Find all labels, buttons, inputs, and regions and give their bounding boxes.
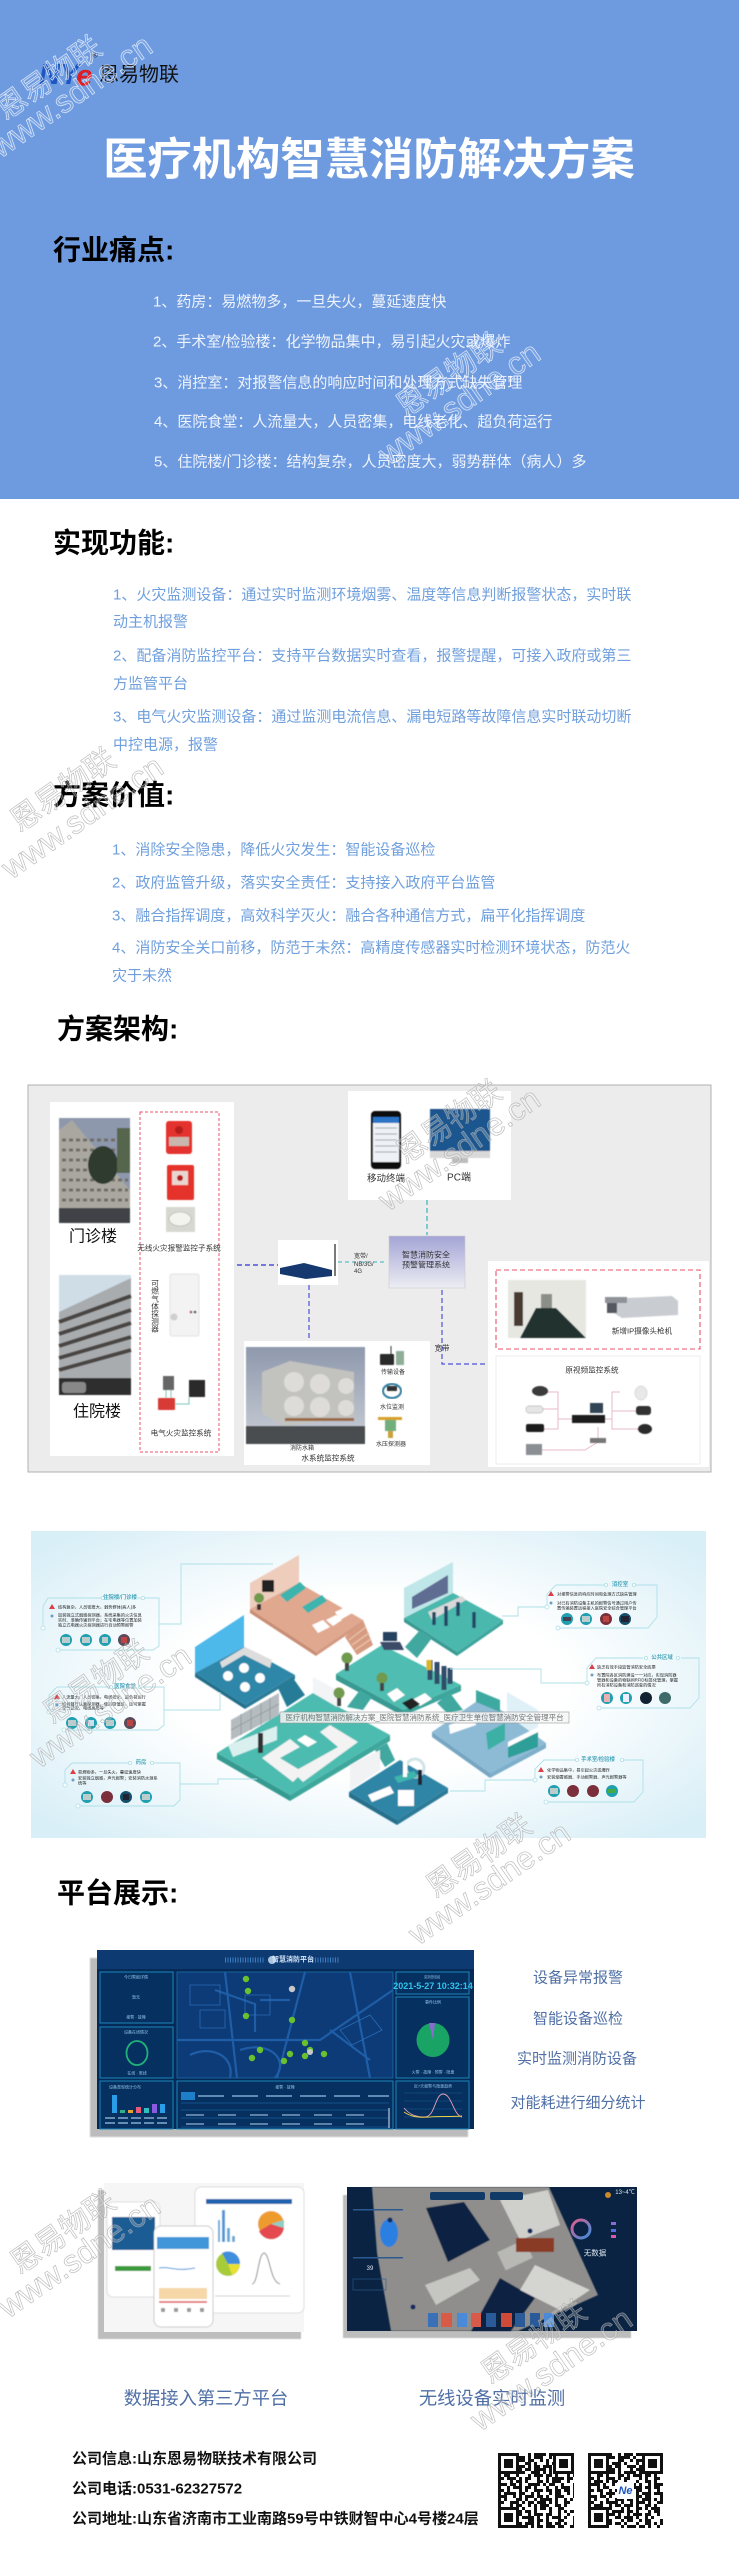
company info: 公司地址:山东省济南市工业南路59号中铁财智中心4号楼24层 xyxy=(72,2510,479,2528)
front phone xyxy=(154,2226,213,2327)
callout: canteen xyxy=(47,1682,220,1732)
feature list: 设备异常报警 xyxy=(533,1970,623,1986)
3D monitoring screenshot xyxy=(343,2187,637,2338)
QR code 1 xyxy=(498,2453,574,2528)
label: 水位监测: 水位监测 xyxy=(380,1403,404,1411)
panel: bar chart: 设备类型统计分布 xyxy=(109,2084,141,2090)
gateway device xyxy=(278,1240,338,1285)
panel: alarm stats: 今日警报详情 xyxy=(124,1974,148,1980)
top bar xyxy=(430,2189,635,2200)
dashboard screenshot xyxy=(90,1950,474,2137)
callout: fire control room: 对已有消防设备主机的报警信号通过用户传 xyxy=(557,1600,637,1606)
label: PC端: PC端 xyxy=(447,1170,471,1184)
panel: device donut xyxy=(100,2027,173,2078)
icon: PC monitor xyxy=(430,1109,490,1163)
icon: water level sensor xyxy=(383,1384,401,1398)
cameras xyxy=(526,1386,652,1455)
callout: fire control room: 对报警信息的响应时间和处理方式缺失管理 xyxy=(557,1590,637,1598)
callout: operating and lab building: 手术室/检验楼 xyxy=(581,1755,616,1763)
image caption bar: 医疗机构智慧消防解决方案_医院智慧消防系统_医疗卫生单位智慧消防安全管理平台 xyxy=(285,1712,564,1722)
list: solution value xyxy=(112,840,630,984)
panel: water system xyxy=(244,1341,430,1465)
bottom icons xyxy=(428,2313,554,2327)
icon: smoke detector xyxy=(166,1207,195,1232)
callout: pharmacy: 安装独立烟感，声光报警；安装消防水源系 xyxy=(78,1774,158,1782)
panel: alarm stats xyxy=(100,1972,173,2023)
list: functions: 2、配备消防监控平台：支持平台数据实时查看，报警提醒，可接入政府或第三 xyxy=(113,646,631,664)
callout: public area xyxy=(450,1653,699,1710)
label: 电气火灾监控系统: 电气火灾监控系统 xyxy=(151,1428,212,1438)
panel: bar chart xyxy=(100,2081,173,2129)
panel: map xyxy=(177,1972,393,2078)
feature list xyxy=(510,1970,646,2112)
icon: mobile phone xyxy=(371,1111,401,1169)
callout: fire control room xyxy=(502,1580,657,1630)
connector: video to platform xyxy=(442,1290,488,1364)
heading: 方案价值: 方案价值: xyxy=(53,780,174,810)
company logo: 恩易物联 xyxy=(99,63,179,86)
watermark 5: 恩易物联 xyxy=(38,1635,155,1731)
list: functions: 1、火灾监测设备：通过实时监测环境烟雾、温度等信息判断报警状态，实时联 xyxy=(113,586,631,604)
icon: red alarm 1 xyxy=(166,1121,192,1154)
QR code 2: Ne xyxy=(618,2485,633,2497)
callout: inpatient building: 结构复杂，人员密度大，弱势群体(病人)多 xyxy=(58,1604,136,1610)
panel: line chart xyxy=(396,2081,469,2129)
label: 住院楼: 住院楼 xyxy=(73,1402,121,1420)
list: industry pain points: 3、消控室：对报警信息的响应时间和处理方式缺失管理 xyxy=(154,374,522,392)
panel: pie chart: 事件比例 xyxy=(425,1998,441,2004)
box: management system: 智慧消防安全 xyxy=(402,1250,450,1260)
list: solution value: 1、消除安全隐患，降低火灾发生：智能设备巡检 xyxy=(112,840,435,858)
callout: canteen: 空气证况，电线高度等 xyxy=(62,1704,104,1712)
company logo: NY xyxy=(39,59,82,91)
panel: terminals xyxy=(348,1091,511,1200)
watermark 8: www.sdne.cn xyxy=(463,2300,639,2438)
feature list: 智能设备巡检 xyxy=(533,2010,623,2028)
caption: wireless monitoring: 无线设备实时监测 xyxy=(419,2388,565,2408)
list: industry pain points: 2、手术室/检验楼：化学物品集中，易引起火灾或爆炸 xyxy=(153,334,511,350)
box: management system: 预警管理系统 xyxy=(402,1260,450,1270)
QR code 2 xyxy=(588,2453,663,2528)
panel: buildings and detectors xyxy=(50,1102,234,1456)
watermark 2: www.sdne.cn xyxy=(371,334,547,472)
top bar: 13~4℃ xyxy=(615,2189,635,2196)
room: dining (blue) xyxy=(195,1615,305,1709)
watermark 3: 恩易物联 xyxy=(5,743,122,839)
company logo xyxy=(39,50,179,92)
heading: 实现功能: 实现功能: xyxy=(53,528,174,558)
dashed box: new IP camera xyxy=(496,1270,700,1349)
callout: operating and lab building xyxy=(450,1755,643,1804)
list: industry pain points: 5、住院楼/门诊楼：结构复杂，人员密度大，弱势群体（病人）多 xyxy=(154,452,587,470)
panel: clock: 实时时间 xyxy=(424,1974,440,1980)
left widget: 39 xyxy=(367,2266,374,2272)
connector: terminals to platform xyxy=(426,1200,428,1235)
panel: alarm table: 报警 · 故障 xyxy=(275,2084,295,2090)
list: functions xyxy=(113,586,631,754)
list: functions: 动主机报警 xyxy=(113,614,188,630)
heading: 行业痛点: 行业痛点: xyxy=(53,234,174,266)
mobile apps screenshot xyxy=(98,2183,304,2339)
photo: inpatient building xyxy=(59,1275,131,1395)
label: broadband: 宽带/ xyxy=(354,1252,368,1260)
label: 新增IP摄像头枪机: 新增IP摄像头枪机 xyxy=(612,1326,673,1336)
icon: water pressure sensor xyxy=(378,1417,402,1438)
platform: lower lobby xyxy=(217,1677,395,1801)
panel: device donut: 设备在线情况 xyxy=(124,2028,148,2034)
callout: inpatient building: 加装独立式烟感探测器，系统采集的火灾信息 xyxy=(58,1612,142,1618)
back phone xyxy=(107,2202,160,2297)
callout: pharmacy xyxy=(63,1758,257,1808)
label: broadband: NB/3G/ xyxy=(354,1262,374,1268)
connector: buildings to gateway xyxy=(237,1264,278,1266)
list: functions: 中控电源，报警 xyxy=(113,736,218,754)
dashboard title xyxy=(225,1954,340,1964)
room: imaging (dark teal) xyxy=(349,1750,448,1825)
list: industry pain points xyxy=(153,292,587,470)
left widget xyxy=(353,2209,403,2290)
list: solution value: 灾于未然 xyxy=(112,968,172,984)
sub-panel: existing video system xyxy=(496,1356,700,1464)
room: lab (light blue) xyxy=(432,1690,546,1778)
panel: video surveillance xyxy=(488,1261,709,1467)
photo: corridor xyxy=(508,1280,586,1338)
callout: pharmacy: 易燃物多，一旦失火，蔓延速度快 xyxy=(78,1768,142,1776)
label: broadband xyxy=(354,1252,374,1275)
room: ward (pink) xyxy=(250,1555,373,1656)
list: industry pain points: 1、药房：易燃物多，一旦失火，蔓延速度快 xyxy=(153,292,446,310)
platform: central lobby xyxy=(336,1632,461,1716)
callout: operating and lab building: 化学物品集中，易引起火灾或爆炸 xyxy=(547,1766,611,1774)
side widget: donut xyxy=(572,2220,616,2258)
panel: alarm table xyxy=(177,2081,393,2129)
list: functions: 方监管平台 xyxy=(113,676,188,692)
watermark 8: 恩易物联 xyxy=(476,2295,593,2391)
icon: electrical fire monitor xyxy=(158,1376,205,1410)
company logo: ® xyxy=(92,50,98,60)
callout: public area: 管器和设备的物联网RFID标签化管理，掌握 xyxy=(597,1676,679,1684)
isometric hospital panel xyxy=(31,1531,706,1838)
heading: 方案架构: 方案架构: xyxy=(57,1014,178,1044)
dashed box: detectors xyxy=(140,1112,219,1452)
callout: canteen: 医院食堂 xyxy=(114,1682,136,1690)
callout: fire control room: 消控室 xyxy=(612,1580,629,1588)
watermark 4: www.sdne.cn xyxy=(371,1080,547,1218)
callout: inpatient building xyxy=(41,1564,273,1652)
label: 消防水箱: 消防水箱 xyxy=(290,1444,314,1452)
watermark 6: 恩易物联 xyxy=(421,1809,538,1905)
header banner xyxy=(0,0,739,499)
callout: public area: 公共区域 xyxy=(651,1653,673,1661)
panel: clock: 2021-5-27 10:32:14 xyxy=(393,1981,473,1991)
panel: line chart: 近7天报警与隐患趋势 xyxy=(414,2082,452,2088)
list: solution value: 3、融合指挥调度，高效科学灭火：融合各种通信方式，扁平化指挥调度 xyxy=(112,908,585,924)
list: functions: 3、电气火灾监测设备：通过监测电流信息、漏电短路等故障信息实时联动切断 xyxy=(113,708,631,726)
label: 宽带: 宽带 xyxy=(434,1342,450,1352)
icon: gas detector xyxy=(170,1274,199,1336)
panel: clock xyxy=(393,1972,473,1994)
callout: canteen: 人流量大，人员密集，电线老化，超负荷运行 xyxy=(62,1694,146,1700)
watermark 6: www.sdne.cn xyxy=(401,1814,577,1952)
feature list: 对能耗进行细分统计 xyxy=(510,2094,646,2112)
scene: rooms and floors xyxy=(195,1555,546,1825)
label: 门诊楼: 门诊楼 xyxy=(69,1228,117,1246)
label: 移动终端: 移动终端 xyxy=(367,1172,405,1184)
tablet xyxy=(195,2187,304,2313)
label: 可燃气体探测器: 可燃气体探测器 xyxy=(150,1279,160,1334)
watermark 7: 恩易物联 xyxy=(5,2185,122,2281)
company info: 公司电话:0531-62327572 xyxy=(72,2480,242,2498)
label: 传输设备: 传输设备 xyxy=(381,1368,405,1376)
list: solution value: 2、政府监管升级，落实安全责任：支持接入政府平台监管 xyxy=(112,874,495,892)
label: 无线火灾报警监控子系统: 无线火灾报警监控子系统 xyxy=(137,1242,221,1252)
side widget: donut: 无数据 xyxy=(584,2248,607,2258)
watermark 2: 恩易物联 xyxy=(391,328,508,424)
heading: 平台展示: 平台展示: xyxy=(57,1876,178,1908)
connector: gateway to water xyxy=(308,1285,310,1338)
list: industry pain points: 4、医院食堂：人流量大，人员密集，电线老化、超负荷运行 xyxy=(154,412,552,430)
company info: 公司信息:山东恩易物联技术有限公司 xyxy=(72,2450,317,2468)
label: 水系统监控系统: 水系统监控系统 xyxy=(301,1452,355,1462)
icon: red alarm 2 xyxy=(167,1165,194,1200)
label: 水压探测器: 水压探测器 xyxy=(376,1440,406,1448)
icon: transmission device xyxy=(380,1346,404,1365)
panel: device donut: 在线 · 离线 xyxy=(127,2070,147,2076)
callout: inpatient building: 住院楼/门诊楼 xyxy=(103,1593,138,1601)
box: management system xyxy=(389,1236,465,1288)
company info xyxy=(72,2450,479,2528)
company logo: e xyxy=(76,60,93,92)
callout: operating and lab building: 安装烟雾感器、手动报警器、声光报警器等 xyxy=(547,1774,627,1780)
callout: pharmacy: 统等 xyxy=(78,1780,86,1786)
callout: public area: 缺乏有效手段监管消防安全底票 xyxy=(597,1664,656,1670)
caption: third-party data: 数据接入第三方平台 xyxy=(124,2388,288,2408)
title: 医疗机构智慧消防解决方案 xyxy=(103,136,635,184)
list: solution value: 4、消防安全关口前移，防范于未然：高精度传感器实时检测环境状态，防范火 xyxy=(112,938,630,956)
callout: public area: 布置院各区消防建设一一对应，实现消防器 xyxy=(597,1672,677,1678)
label: broadband: 4G xyxy=(354,1269,362,1275)
callout: canteen: 如何餐厅认真探测器，使后厨值班，还可掌握 xyxy=(62,1700,147,1708)
wiring xyxy=(540,1392,640,1450)
callout: fire control room: 置传输装置远程接入医院安全综合管理平台 xyxy=(557,1604,637,1612)
architecture diagram xyxy=(28,1085,711,1472)
watermark 5: www.sdne.cn xyxy=(22,1637,198,1775)
panel: pie chart: 火警 · 故障 · 预警 · 隐患 xyxy=(412,2068,454,2074)
callout: public area: 所有消防设备和消防巡查的情况 xyxy=(597,1682,656,1688)
panel: alarm stats: 报警 · 故障 xyxy=(126,2014,146,2020)
callout: inpatient building: 实时、准确传输到平台；在宅电器等位置加装 xyxy=(58,1616,143,1624)
connector: gateway to platform xyxy=(338,1261,386,1263)
callout: pharmacy: 药房 xyxy=(136,1758,147,1766)
photo: water tank xyxy=(246,1347,365,1444)
watermark 4: 恩易物联 xyxy=(391,1075,508,1171)
panel: alarm stats: 暂无 xyxy=(132,1994,140,2000)
icon: bullet camera xyxy=(605,1296,678,1318)
feature list: 实时监测消防设备 xyxy=(517,2050,637,2068)
dashboard title: 智慧消防平台 xyxy=(272,1954,314,1964)
photo: outpatient building xyxy=(59,1118,130,1223)
room: control room xyxy=(404,1562,503,1658)
label: 原视频监控系统: 原视频监控系统 xyxy=(565,1364,619,1374)
panel: pie chart xyxy=(396,1997,469,2078)
callout: inpatient building: 独立式电器火灾探测器进行自动预警报警 xyxy=(58,1622,134,1628)
